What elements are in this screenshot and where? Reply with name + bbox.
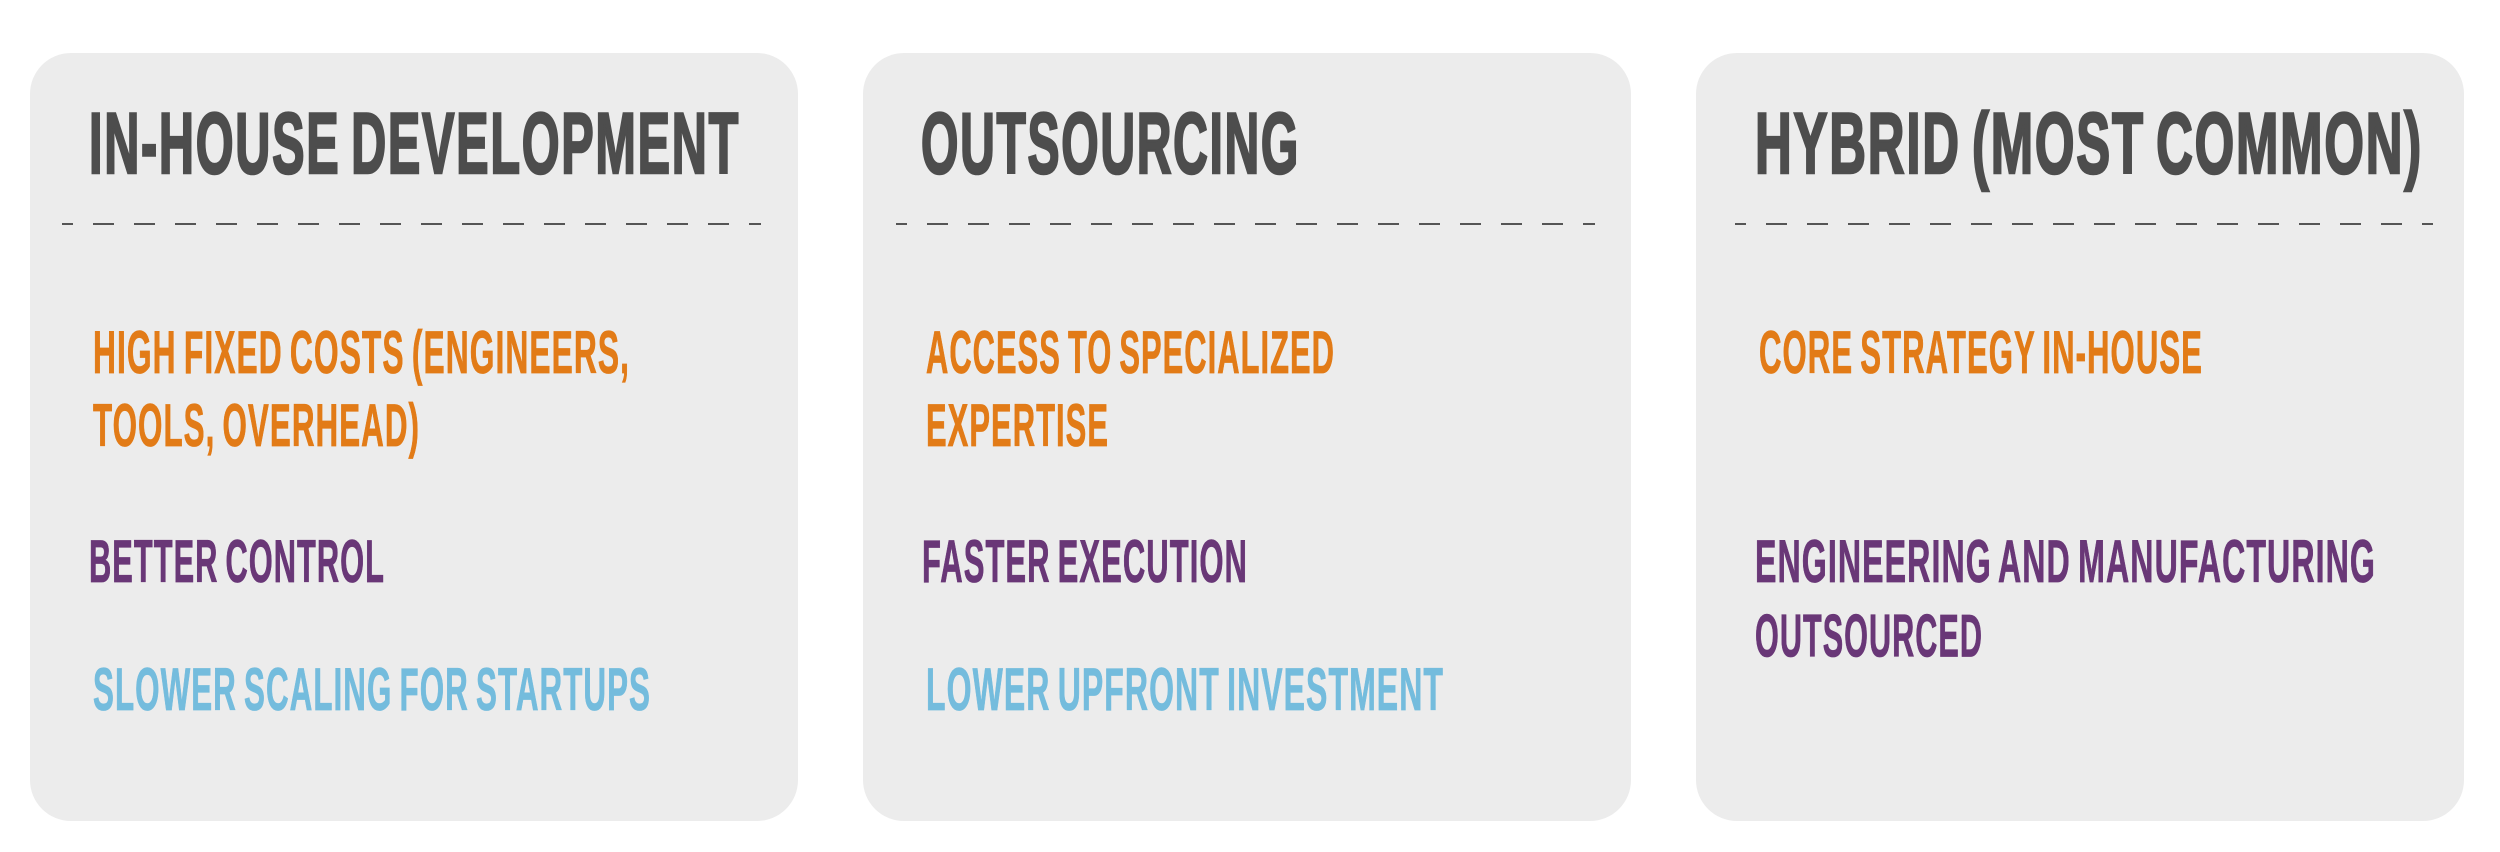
card background — [863, 53, 1631, 821]
cost text: HIGH FIXED COSTS (ENGINEERS, — [93, 319, 630, 386]
scaling text: SLOWER SCALING FOR STARTUPS — [93, 656, 651, 723]
panel: outsourcing — [863, 53, 1631, 821]
card background — [1696, 53, 2464, 821]
expertise text, second line: EXPERTISE — [926, 392, 1109, 459]
execution text: FASTER EXECUTION — [922, 528, 1248, 595]
panel: hybrid — [1696, 53, 2464, 821]
expertise text: ACCESS TO SPECIALIZED — [926, 319, 1335, 386]
panel: in-house development — [30, 53, 798, 821]
investment text: LOWER UPFRONT INVESTMENT — [926, 656, 1444, 723]
control text: BETTER CONTROL — [89, 528, 385, 595]
heading: IN-HOUSE DEVELOPMENT — [89, 96, 740, 192]
engineering text, second line: OUTSOURCED — [1755, 602, 1983, 670]
card background — [30, 53, 798, 821]
cost text, second line: TOOLS, OVERHEAD) — [93, 392, 420, 459]
heading: OUTSOURCING — [921, 96, 1300, 192]
